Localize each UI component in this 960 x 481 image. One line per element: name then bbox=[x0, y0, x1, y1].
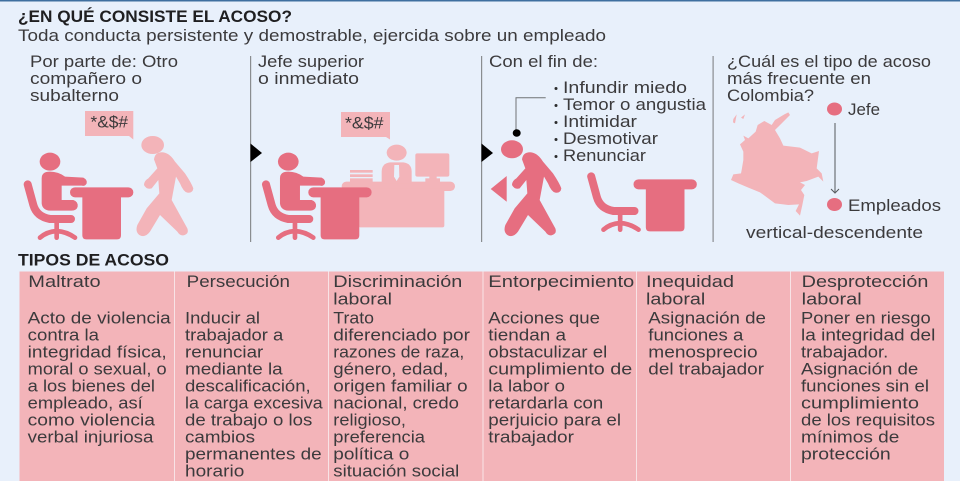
divider 2 bbox=[481, 56, 482, 242]
title: ¿EN QUÉ CONSISTE EL ACOSO? bbox=[18, 7, 292, 26]
column: discriminación laboral: diferenciado por bbox=[333, 326, 471, 344]
column: entorpecimiento bbox=[488, 273, 634, 446]
column: maltrato: Maltrato bbox=[28, 273, 101, 291]
hierarchy arrow: jefe to empleados bbox=[827, 101, 941, 215]
column: entorpecimiento: obstaculizar el bbox=[488, 344, 607, 362]
panel: por parte de un compañero bbox=[28, 53, 193, 239]
icon: empty chair and desk bbox=[591, 176, 697, 231]
column: discriminación laboral: Trato bbox=[333, 310, 374, 328]
column: persecución: permanentes de bbox=[185, 446, 322, 464]
panel: tipo de acoso más frecuente bbox=[727, 53, 941, 242]
column: desprotección laboral bbox=[801, 273, 935, 464]
column: maltrato bbox=[28, 273, 172, 446]
panel: jefe superior bbox=[258, 53, 455, 239]
column: desprotección laboral: trabajador. bbox=[801, 344, 888, 362]
column: desprotección laboral: funciones sin el bbox=[801, 378, 929, 396]
panel: con el fin de bbox=[489, 53, 707, 236]
column: persecución: renunciar bbox=[185, 344, 264, 362]
icon: seated employee at desk bbox=[28, 153, 133, 239]
column: desprotección laboral: laboral bbox=[802, 290, 862, 308]
list of purposes: Desmotivar bbox=[563, 130, 659, 148]
icon: walking coworker bbox=[137, 136, 193, 236]
table background bbox=[20, 272, 944, 481]
column: inequidad laboral bbox=[646, 273, 766, 378]
panel text: por parte de: compañero o bbox=[30, 70, 142, 88]
column: discriminación laboral: origen familiar o bbox=[333, 378, 468, 396]
column: desprotección laboral: Poner en riesgo bbox=[801, 310, 931, 328]
panel text: por parte de: subalterno bbox=[30, 87, 119, 105]
column: persecución: Persecución bbox=[187, 273, 290, 291]
column: entorpecimiento: la labor o bbox=[488, 378, 565, 396]
column: maltrato: a los bienes del bbox=[28, 378, 155, 396]
column: maltrato: Acto de violencia bbox=[28, 310, 172, 328]
map of Colombia bbox=[731, 112, 823, 216]
panel text: question: Colombia? bbox=[727, 87, 814, 105]
column: desprotección laboral: Desprotección bbox=[802, 273, 928, 291]
column: inequidad laboral: laboral bbox=[646, 290, 705, 308]
column: entorpecimiento: cumplimiento de bbox=[488, 360, 632, 378]
divider 3 bbox=[712, 56, 714, 242]
column: inequidad laboral: Asignación de bbox=[648, 310, 766, 328]
column: persecución: Inducir al bbox=[185, 310, 260, 328]
column: discriminación laboral: género, edad, bbox=[333, 360, 448, 378]
column: persecución: descalificación, bbox=[185, 378, 311, 396]
column: maltrato: moral o sexual, o bbox=[28, 360, 167, 378]
column: persecución: mediante la bbox=[185, 360, 284, 378]
column: discriminación laboral: preferencia bbox=[333, 428, 426, 446]
column: maltrato: empleado, así bbox=[28, 394, 143, 412]
column: discriminación laboral bbox=[333, 273, 471, 480]
panel text: por parte de: Por parte de: Otro bbox=[30, 53, 178, 71]
list of purposes: Intimidar bbox=[563, 113, 638, 131]
speech bubble: *&$# bbox=[345, 114, 384, 132]
panel text: question bbox=[727, 53, 931, 105]
speech bubble bbox=[341, 112, 390, 140]
leader line with dot bbox=[513, 98, 546, 137]
panel text: question: más frecuente en bbox=[727, 70, 871, 88]
arrow marker 1 bbox=[250, 144, 262, 162]
column: maltrato: integridad física, bbox=[28, 344, 167, 362]
speech bubble: *&$# bbox=[90, 114, 129, 132]
column: discriminación laboral: situación social bbox=[333, 462, 459, 480]
column: maltrato: verbal injuriosa bbox=[28, 428, 154, 446]
column: discriminación laboral: política o bbox=[333, 446, 409, 464]
list of purposes: Infundir miedo bbox=[563, 79, 687, 97]
icon: employee walking away bbox=[491, 140, 561, 236]
column: entorpecimiento: tiendan a bbox=[488, 326, 567, 344]
column: maltrato: contra la bbox=[28, 326, 100, 344]
panel text: question: ¿Cuál es el tipo de acoso bbox=[727, 53, 931, 71]
column: entorpecimiento: trabajador bbox=[488, 428, 575, 446]
column: discriminación laboral: razones de raza, bbox=[333, 344, 464, 362]
column: persecución: de trabajo o los bbox=[185, 412, 312, 430]
panel text: por parte de bbox=[30, 53, 178, 105]
column: persecución: cambios bbox=[185, 428, 255, 446]
node: empleados: Empleados bbox=[848, 197, 941, 215]
panel text: con el fin de: Con el fin de: bbox=[489, 53, 598, 71]
panel text: jefe superior: Jefe superior bbox=[258, 53, 365, 71]
list of purposes: Temor o angustia bbox=[563, 96, 707, 114]
column: maltrato: como violencia bbox=[28, 412, 156, 430]
column: inequidad laboral: Inequidad bbox=[646, 273, 734, 291]
icon: boss at desk bbox=[342, 145, 455, 227]
arrow marker 2 bbox=[482, 144, 493, 162]
arrow bbox=[831, 123, 839, 193]
column: inequidad laboral: del trabajador bbox=[648, 360, 765, 378]
column: persecución bbox=[185, 273, 324, 480]
column: discriminación laboral: religioso, bbox=[333, 412, 406, 430]
list of purposes bbox=[554, 79, 707, 165]
column: inequidad laboral: menosprecio bbox=[648, 344, 758, 362]
table: tipos de acoso bbox=[20, 272, 944, 481]
column: desprotección laboral: protección bbox=[801, 446, 891, 464]
column: persecución: horario bbox=[185, 462, 244, 480]
column: persecución: trabajador a bbox=[185, 326, 284, 344]
column: entorpecimiento: perjuicio para el bbox=[488, 412, 621, 430]
subtitle: Toda conducta persistente y demostrable, ejercida sobre un empleado bbox=[18, 27, 606, 45]
caption: vertical-descendente bbox=[746, 224, 923, 242]
column: discriminación laboral: laboral bbox=[333, 290, 392, 308]
icon: seated employee at desk bbox=[266, 153, 372, 239]
column: entorpecimiento: retardarla con bbox=[488, 394, 603, 412]
column: desprotección laboral: Asignación de bbox=[801, 360, 918, 378]
list of purposes: Renunciar bbox=[563, 147, 647, 165]
column: desprotección laboral: de los requisitos bbox=[801, 412, 935, 430]
column: entorpecimiento: Acciones que bbox=[488, 310, 600, 328]
column: inequidad laboral: funciones a bbox=[648, 326, 744, 344]
panel text: jefe superior: o inmediato bbox=[258, 70, 359, 88]
speech bubble bbox=[85, 111, 133, 140]
heading: tipos de acoso: TIPOS DE ACOSO bbox=[18, 252, 169, 270]
node: jefe: Jefe bbox=[848, 101, 880, 119]
column: desprotección laboral: cumplimiento bbox=[801, 394, 919, 412]
column: discriminación laboral: Discriminación bbox=[333, 273, 462, 291]
column: desprotección laboral: mínimos de bbox=[801, 428, 899, 446]
divider 1 bbox=[250, 56, 251, 242]
column: discriminación laboral: nacional, credo bbox=[333, 394, 459, 412]
column: entorpecimiento: Entorpecimiento bbox=[488, 273, 634, 291]
panel text: jefe superior bbox=[258, 53, 365, 88]
column: persecución: la carga excesiva bbox=[185, 394, 324, 412]
column: desprotección laboral: la integridad del bbox=[801, 326, 935, 344]
